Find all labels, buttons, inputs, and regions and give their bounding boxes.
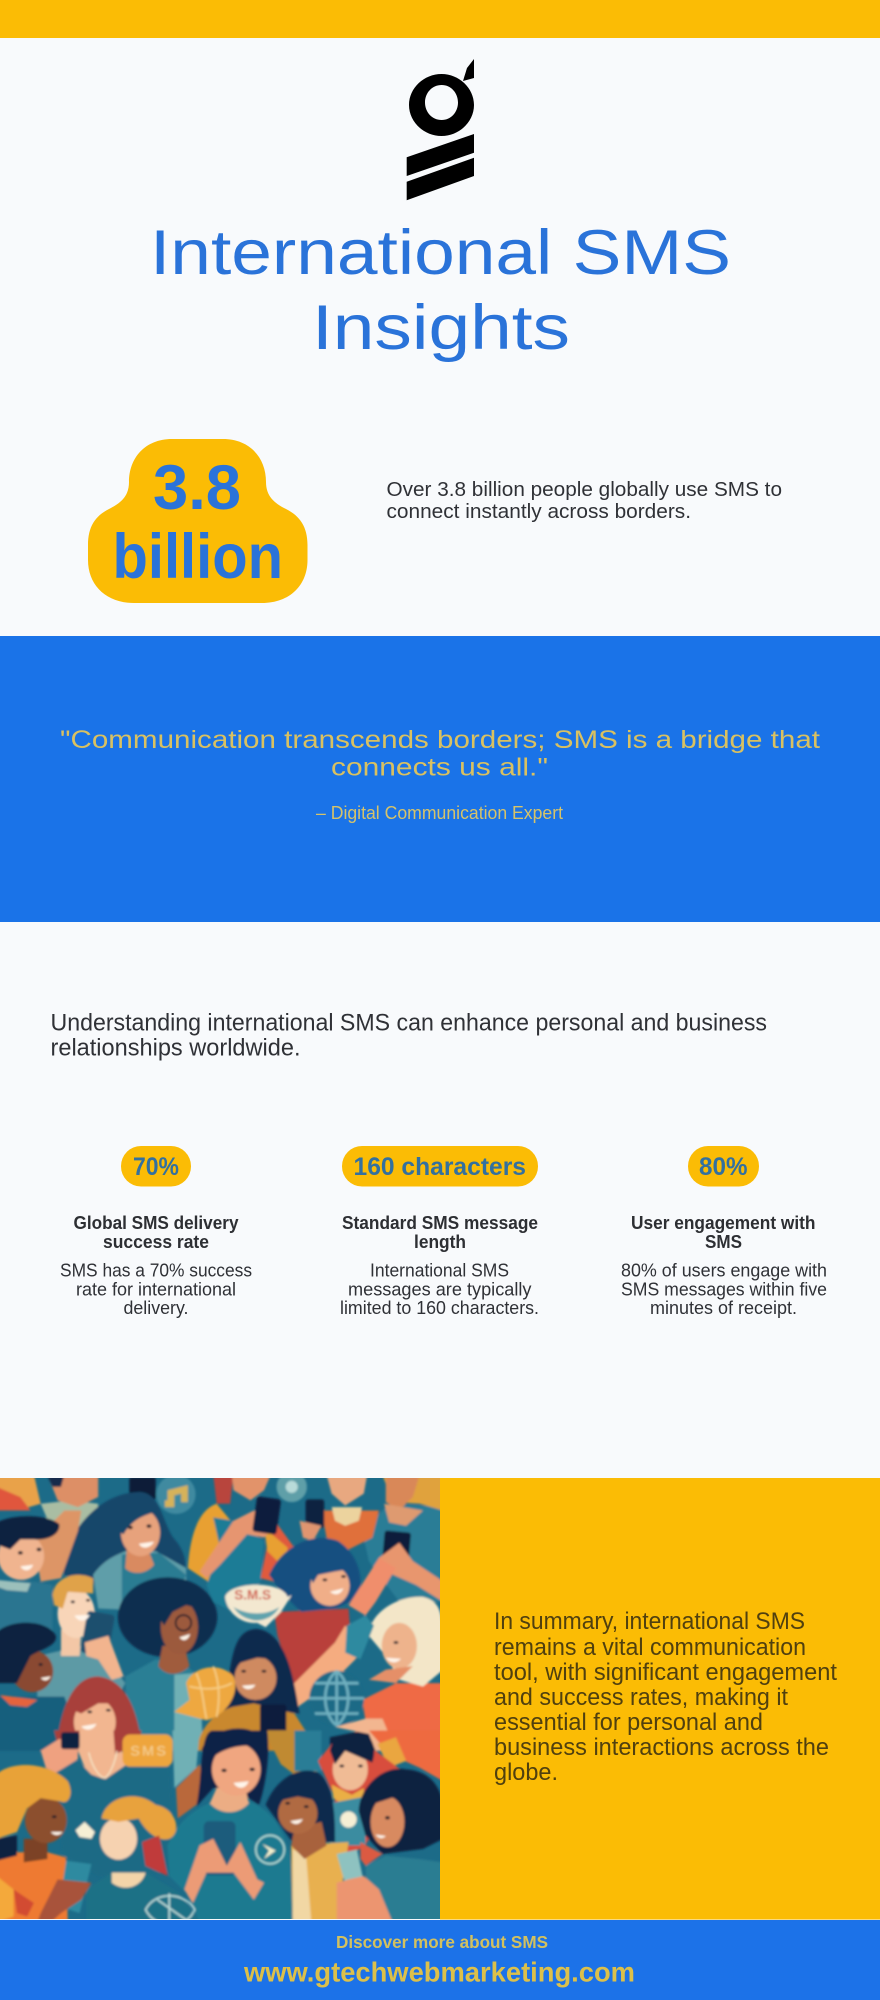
icon: logo bbox=[407, 59, 474, 200]
card body: SMS has a 70% success bbox=[60, 1260, 252, 1280]
faces: eyes and smiles (lower group) bbox=[52, 1765, 390, 1819]
pill bbox=[342, 1146, 538, 1186]
stat badge bbox=[88, 439, 308, 603]
summary text: tool, with significant engagement bbox=[494, 1659, 837, 1686]
card body: delivery. bbox=[124, 1298, 188, 1318]
title: International SMS bbox=[150, 218, 731, 288]
card body: 80% of users engage with bbox=[621, 1260, 827, 1280]
card body: SMS messages within five bbox=[621, 1280, 827, 1300]
summary text: and success rates, making it bbox=[494, 1684, 788, 1711]
stat card: 80% bbox=[621, 1146, 827, 1318]
intro text: Understanding international SMS can enhance personal and business bbox=[50, 1010, 767, 1036]
card body: minutes of receipt. bbox=[650, 1298, 797, 1318]
pill bbox=[121, 1146, 191, 1186]
illustration: people using phones: SMS bbox=[130, 1744, 166, 1760]
quote text: "Communication transcends borders; SMS is a bridge that bbox=[60, 726, 820, 754]
stat description: Over 3.8 billion people globally use SMS to bbox=[386, 478, 782, 501]
summary text: essential for personal and bbox=[494, 1709, 763, 1736]
card body: rate for international bbox=[76, 1280, 236, 1300]
pill bbox=[688, 1146, 759, 1186]
summary text: business interactions across the bbox=[494, 1734, 829, 1761]
footer call to action: Discover more about SMS bbox=[336, 1932, 548, 1952]
card heading: User engagement with bbox=[631, 1213, 816, 1233]
card heading bbox=[631, 1213, 816, 1252]
footer url: www.gtechwebmarketing.com bbox=[243, 1956, 635, 1988]
card body: limited to 160 characters. bbox=[340, 1298, 539, 1318]
card body bbox=[60, 1260, 252, 1318]
top yellow band bbox=[0, 0, 880, 38]
intro text: relationships worldwide. bbox=[50, 1034, 300, 1062]
card heading: SMS bbox=[705, 1232, 742, 1252]
title bbox=[150, 218, 731, 363]
intro text bbox=[50, 1010, 767, 1062]
card heading bbox=[74, 1213, 238, 1252]
summary text: globe. bbox=[494, 1759, 558, 1786]
summary text: In summary, international SMS bbox=[494, 1608, 805, 1635]
card heading: length bbox=[414, 1232, 466, 1252]
stat description bbox=[386, 478, 782, 523]
stat number: billion bbox=[112, 522, 283, 592]
stat card: 70% bbox=[60, 1146, 252, 1318]
card body: International SMS bbox=[370, 1260, 509, 1280]
faces: eyes and smiles (upper group) bbox=[18, 1524, 398, 1713]
stat number bbox=[112, 453, 283, 592]
title: Insights bbox=[312, 293, 570, 363]
summary text: remains a vital communication bbox=[494, 1634, 806, 1661]
stat number: 3.8 bbox=[153, 453, 241, 523]
panel: footer bbox=[0, 1920, 880, 2000]
pill: 80% bbox=[699, 1153, 748, 1181]
illustration: people using phones: S.M.S bbox=[234, 1588, 271, 1603]
panel: summary bbox=[440, 1478, 880, 1920]
summary text bbox=[494, 1608, 837, 1786]
panel: quote bbox=[0, 636, 880, 922]
card heading bbox=[342, 1213, 538, 1252]
stat description: connect instantly across borders. bbox=[386, 500, 691, 523]
stat card: 160 characters bbox=[340, 1146, 539, 1318]
card heading: success rate bbox=[103, 1232, 209, 1252]
card heading: Standard SMS message bbox=[342, 1213, 538, 1233]
card body bbox=[340, 1260, 539, 1318]
quote attribution: – Digital Communication Expert bbox=[316, 803, 563, 823]
quote text bbox=[60, 726, 820, 782]
panel: 3.8 billion stat bbox=[88, 439, 782, 603]
card body: messages are typically bbox=[348, 1280, 532, 1300]
pill: 70% bbox=[133, 1153, 179, 1181]
card heading: Global SMS delivery bbox=[74, 1213, 238, 1233]
illustration: people using phones bbox=[0, 1472, 443, 1925]
quote text: connects us all." bbox=[331, 754, 548, 782]
pill: 160 characters bbox=[354, 1153, 526, 1181]
card body bbox=[621, 1260, 827, 1318]
